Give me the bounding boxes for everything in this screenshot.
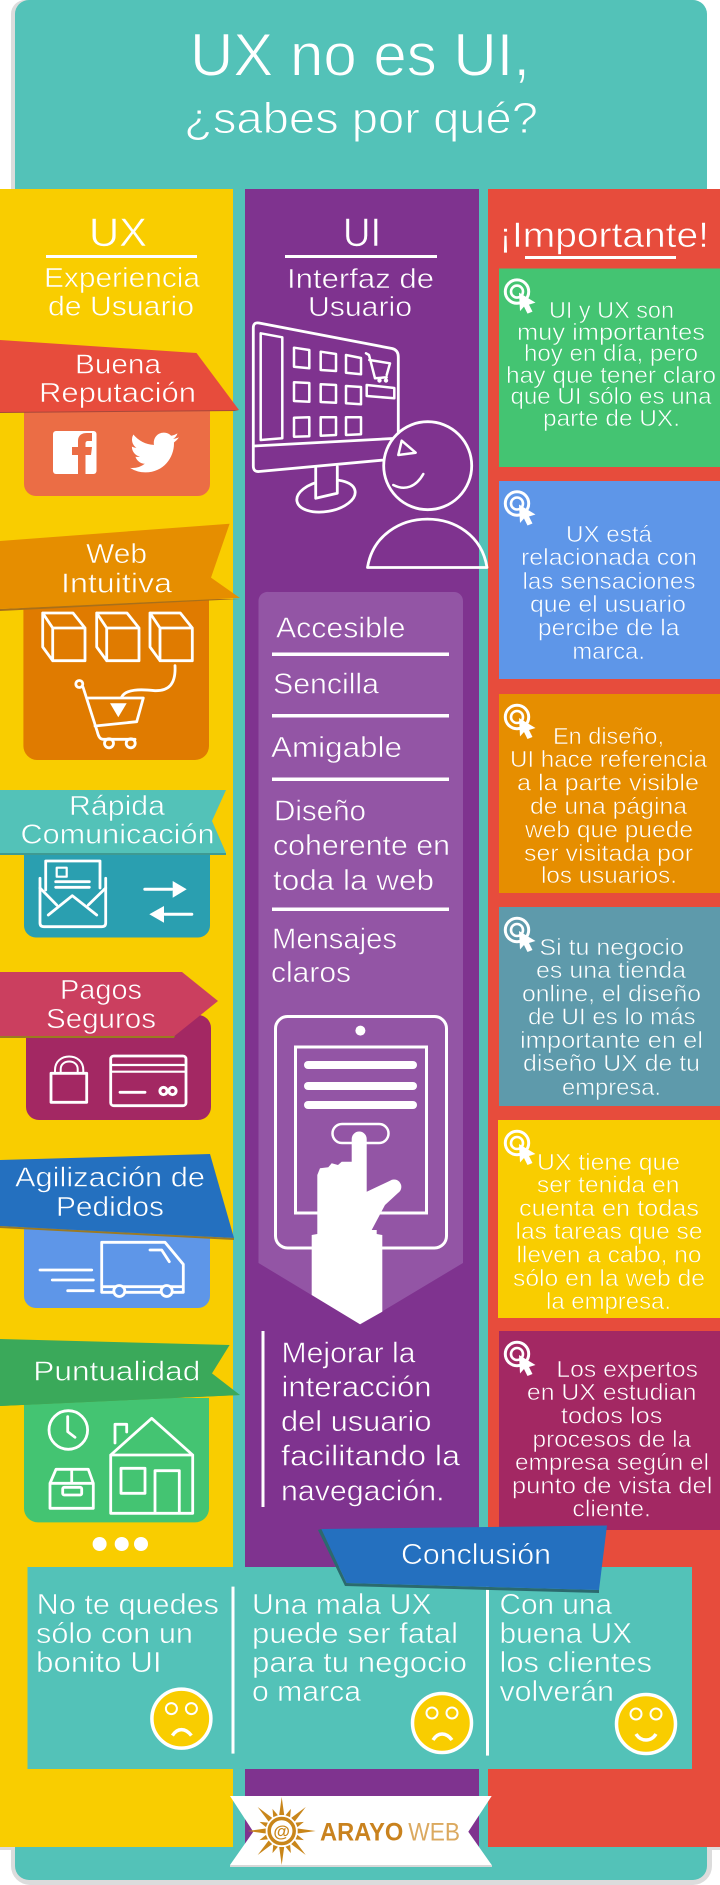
banner: Pagos Seguros: Seguros [46,1003,156,1034]
wordmark: ARAYO [320,1819,403,1847]
callout: yellow: lleven a cabo, no [516,1242,702,1268]
banner: Agilización de Pedidos [0,1154,234,1240]
callout: orange: a la parte visible [517,770,699,796]
list: UI qualities: Amigable [271,732,402,764]
box: pagos icons [26,1015,211,1120]
list: UI qualities: Mensajes [272,924,397,956]
list: UI qualities: coherente en [273,830,450,862]
callout: green: parte de UX. [543,405,680,431]
panel: Importante column [488,189,720,1847]
heading: UI: Interfaz de [287,263,434,294]
icon: click target [505,280,536,314]
icon: click target [505,1131,536,1165]
callout: green: hay que tener claro [506,362,716,388]
icon: click target [505,705,536,739]
callout: magenta [499,1331,720,1530]
box: UX reputation icons [24,405,210,496]
icon: house [111,1418,193,1513]
callout: magenta: cliente. [572,1496,651,1522]
callout: slate: diseño UX de tu [523,1050,700,1076]
conclusion 2: o marca [252,1676,362,1708]
heading: UX: Experiencia [44,262,200,293]
icon: sun [248,1797,316,1865]
callout: slate: Si tu negocio [539,934,684,960]
icon: user [368,422,487,568]
banner: Web Intuitiva [0,524,240,611]
banner: Pagos Seguros [0,972,218,1038]
conclusion 3: los clientes [500,1647,652,1679]
conclusion 2: puede ser fatal [252,1618,458,1650]
text block: UI goal [262,1331,461,1508]
banner: Agilización de Pedidos: Agilización de [15,1162,205,1192]
callout: orange: En diseño, [553,723,664,749]
callout: slate [499,907,720,1106]
callout: blue: marca. [572,638,645,664]
banner: Conclusión: Conclusión [401,1539,551,1571]
icon: facebook [53,431,96,474]
box: puntualidad icons [24,1398,209,1522]
banner: Buena Reputación: Buena [75,348,161,380]
conclusion 1 [36,1589,219,1748]
banner: Pagos Seguros: Pagos [60,974,142,1005]
callout: yellow: sólo en la web de [513,1265,705,1291]
dots [93,1537,148,1551]
callout: yellow: las tareas que se [516,1218,702,1244]
callout: orange: UI hace referencia [510,746,707,772]
heading: UI: Usuario [308,291,412,322]
callout: slate: online, el diseño [522,981,701,1007]
banner: Conclusión [318,1526,607,1593]
callout: magenta: procesos de la [533,1426,691,1452]
banner: Buena Reputación [0,340,239,413]
callout: magenta: empresa según el [515,1449,709,1475]
heading: UI: UI [343,211,381,255]
heading: UX: de Usuario [48,290,194,322]
callout: blue: las sensaciones [522,568,696,594]
callout: magenta: en UX estudian [527,1379,696,1405]
callout: blue: UX está [566,521,652,547]
heading: Importante: ¡Importante! [499,216,709,255]
callout: orange [499,694,720,893]
icon: parcel [50,1469,93,1508]
icon: exchange arrows [143,881,193,923]
banner: Web Intuitiva: Intuitiva [61,568,172,599]
icon: clock [49,1411,88,1449]
panel: UX column [0,189,233,1847]
callout: slate: importante en el [520,1027,703,1053]
callout: yellow: ser tenida en [537,1172,679,1198]
box: comunicación icons [24,850,210,938]
callout: green: muy importantes [517,319,705,345]
callout: yellow [498,1120,720,1318]
conclusion 3 [500,1589,676,1754]
icon: monitor [253,323,398,516]
conclusion 3: buena UX [500,1618,632,1650]
banner: Rápida Comunicación [0,790,226,855]
icon: padlock [51,1056,87,1102]
icon: click target [505,1342,536,1376]
title: ¿sabes por qué? [184,94,538,143]
callout: blue: relacionada con [521,544,697,570]
icon: click target [505,492,536,526]
conclusion 1: sólo con un [36,1618,193,1650]
callout: green: UI y UX son [549,297,674,323]
callout: slate: empresa. [562,1074,661,1100]
callout: slate: de UI es lo más [528,1004,696,1030]
heading: UI [285,211,437,322]
divider [232,1587,234,1754]
callout: blue: que el usuario [530,591,686,617]
heading: UX [44,211,200,322]
wordmark [320,1819,460,1847]
text block: UI goal: facilitando la [281,1441,461,1473]
icon: sad face [412,1694,472,1752]
banner: Puntualidad: Puntualidad [33,1355,200,1386]
list: UI qualities [271,613,450,989]
conclusion 2: Una mala UX [252,1589,432,1621]
panel: UI column [245,189,479,1847]
list: UI qualities: claros [271,957,351,989]
icon: cubes [43,613,192,661]
conclusion 3: volverán [500,1676,614,1708]
heading: UX: UX [89,211,147,255]
icon: shopping cart [76,666,175,748]
wordmark: WEB [408,1819,460,1847]
callout: blue [499,481,720,679]
callout: yellow: UX tiene que [537,1149,680,1175]
callout: blue: percibe de la [538,614,680,640]
callout: magenta: punto de vista del [512,1473,712,1499]
list: UI qualities: Diseño [274,795,366,827]
conclusion 2: para tu negocio [252,1647,467,1679]
conclusion 2 [252,1589,472,1752]
title: UX no es UI, [190,22,530,88]
callout: magenta: Los expertos [556,1356,698,1382]
divider [486,1587,489,1756]
callout: slate: es una tienda [536,957,686,983]
conclusion 3: Con una [500,1589,613,1621]
icon: sun: @ [273,1822,290,1841]
text block: UI goal: interacción [282,1372,432,1404]
icon: click target [505,918,536,952]
callout: green [499,268,720,467]
illustration: monitor and user [253,323,487,568]
box: web intuitiva icons [23,595,209,760]
icon: twitter [130,433,179,472]
conclusion 1: bonito UI [36,1647,162,1679]
callout: orange: web que puede [524,816,693,842]
callout: orange: ser visitada por [524,840,693,866]
logo ribbon [230,1796,492,1867]
list: UI qualities: Sencilla [273,668,380,700]
text block: UI goal: del usuario [281,1406,432,1438]
callout: orange: de una página [530,793,687,819]
conclusion 1: No te quedes [37,1589,219,1621]
callout: orange: los usuarios. [541,862,677,888]
banner: Buena Reputación: Reputación [39,377,196,408]
icon: happy face [616,1694,676,1754]
text block: UI goal: Mejorar la [282,1338,416,1370]
banner: Rápida Comunicación: Comunicación [20,819,214,850]
banner: Puntualidad [0,1339,240,1406]
callout: green: hoy en día, pero [524,340,698,366]
banner: Web Intuitiva: Web [86,538,147,569]
list: UI qualities: toda la web [273,865,434,897]
icon: credit card [111,1056,186,1106]
panel: UI features [258,592,463,1324]
list: UI qualities: Accesible [276,613,406,645]
icon: sad face [152,1689,211,1748]
callout: green: que UI sólo es una [510,383,712,409]
callout: yellow: cuenta en todas [519,1195,699,1221]
text block: UI goal: navegación. [281,1476,444,1508]
panel: conclusions [28,1567,692,1769]
callout: magenta: todos los [561,1403,662,1429]
box: pedidos icons [24,1222,210,1308]
banner: Agilización de Pedidos: Pedidos [56,1191,164,1222]
icon: tablet with hand [276,1016,446,1324]
banner: Rápida Comunicación: Rápida [69,790,165,821]
icon: delivery truck [40,1242,183,1296]
title [184,22,538,143]
icon: envelope [40,861,106,927]
callout: yellow: la empresa. [546,1288,671,1314]
